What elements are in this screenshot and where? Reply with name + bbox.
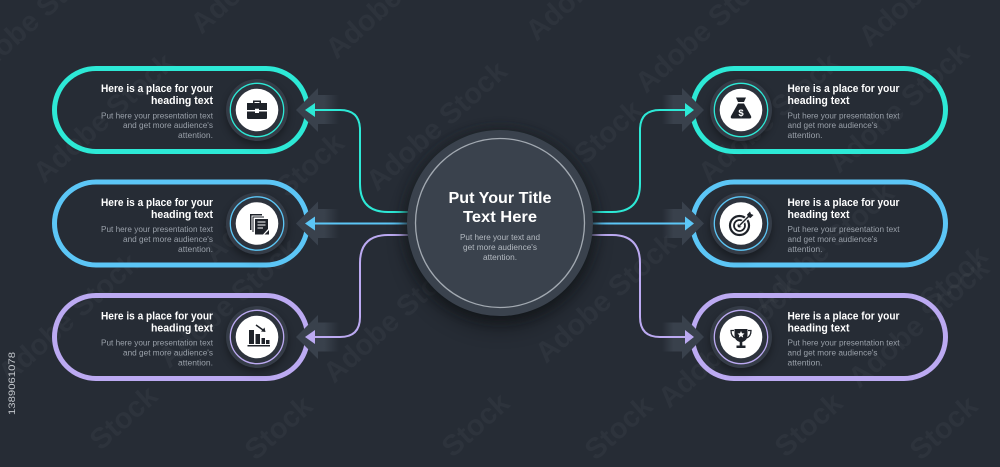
icon: money bag: $ [738, 108, 744, 119]
body text: and get more audience's [788, 348, 878, 358]
heading: Here is a place for your [101, 197, 214, 209]
body text: and get more audience's [123, 348, 213, 358]
subtitle [460, 232, 540, 262]
heading: heading text [788, 95, 850, 107]
heading: heading text [151, 322, 213, 334]
body text [788, 338, 900, 368]
body text [788, 110, 900, 140]
subtitle: get more audience's [463, 242, 537, 252]
panel: right lilac [662, 296, 946, 378]
central circle [403, 127, 597, 327]
body text: and get more audience's [123, 120, 213, 130]
connector: left blue arrow [305, 216, 410, 230]
body text: attention. [788, 130, 822, 140]
arrow block [296, 88, 339, 132]
watermark: Adobe Stock [692, 47, 846, 190]
heading: heading text [788, 209, 850, 221]
icon: target [710, 192, 772, 259]
arrow block [296, 315, 339, 359]
pill outline [692, 182, 946, 265]
pill outline [54, 296, 308, 378]
heading: Here is a place for your [101, 83, 214, 95]
body text: attention. [178, 358, 213, 368]
body text: and get more audience's [788, 120, 878, 130]
body text [101, 338, 214, 368]
connector: right lilac arrow [590, 235, 694, 344]
connector: right blue arrow [590, 216, 694, 230]
watermark: Stock [904, 389, 985, 467]
heading: heading text [151, 95, 213, 107]
disc [407, 130, 593, 316]
body text: attention. [788, 358, 822, 368]
glow shadow [403, 127, 597, 321]
heading [788, 310, 900, 334]
watermark: Adobe Stock [197, 127, 351, 270]
connector: left teal arrow [305, 103, 410, 212]
icon: documents [226, 192, 288, 259]
watermark: Adobe Stock [842, 252, 996, 395]
panel: right teal [662, 68, 946, 152]
body text: Put here your presentation text [101, 110, 214, 120]
watermark: Adobe Stock [495, 94, 649, 237]
watermark: Adobe Stock [317, 247, 471, 390]
icon: trophy [710, 306, 772, 372]
connector: right teal arrow [590, 103, 694, 212]
watermark: Stock [579, 389, 660, 467]
connector: left lilac arrow [305, 235, 410, 344]
heading [101, 83, 214, 107]
title: Put Your Title [448, 190, 552, 207]
pill outline [54, 68, 308, 152]
body text: attention. [178, 244, 213, 254]
icon: briefcase [226, 79, 288, 145]
panel: left blue [54, 182, 339, 265]
heading: heading text [151, 209, 213, 221]
watermark: Adobe Stock [747, 177, 901, 320]
heading: Here is a place for your [788, 197, 900, 209]
watermark: Stock [239, 389, 320, 467]
heading: heading text [788, 322, 850, 334]
arrow block [662, 202, 704, 246]
watermark: Adobe Stock [152, 232, 306, 375]
watermark: Adobe Stock [27, 47, 181, 190]
title [448, 190, 552, 226]
drop shadow [408, 143, 592, 327]
watermark: Stock [769, 386, 850, 464]
watermark: Adobe Stock [529, 227, 683, 370]
stock id: 1389061078 [7, 352, 18, 415]
watermark: Adobe Stock [360, 55, 514, 198]
icon: bar chart [226, 306, 288, 372]
inner ring [416, 138, 584, 308]
arrow block [296, 202, 339, 246]
body text: Put here your presentation text [788, 338, 900, 348]
watermark: Adobe Stock [822, 37, 976, 180]
arrow block [662, 315, 704, 359]
panel: right blue [662, 182, 946, 265]
icon: money bag [710, 79, 772, 145]
watermark: Stock [84, 379, 165, 457]
heading [101, 197, 214, 221]
body text: Put here your presentation text [788, 224, 900, 234]
body text [788, 224, 900, 254]
body text: and get more audience's [788, 234, 878, 244]
heading [101, 310, 214, 334]
pill outline [692, 296, 946, 378]
body text: Put here your presentation text [101, 224, 214, 234]
heading: Here is a place for your [788, 310, 900, 322]
body text: Put here your presentation text [788, 110, 900, 120]
pill outline [54, 182, 308, 265]
heading [788, 83, 900, 107]
heading [788, 197, 900, 221]
heading: Here is a place for your [788, 83, 900, 95]
pill outline [692, 68, 946, 152]
panel: left lilac [54, 296, 339, 378]
title: Text Here [463, 209, 537, 226]
body text: attention. [178, 130, 213, 140]
subtitle: attention. [483, 252, 517, 262]
heading: Here is a place for your [101, 310, 214, 322]
watermark: Stock [914, 239, 995, 317]
body text: Put here your presentation text [101, 338, 214, 348]
body text: attention. [788, 244, 822, 254]
subtitle: Put here your text and [460, 232, 540, 242]
arrow block [662, 88, 704, 132]
body text [101, 110, 214, 140]
panel: left teal [54, 68, 339, 152]
watermark: Stock [436, 386, 517, 464]
body text [101, 224, 214, 254]
watermark: Adobe Stock [652, 272, 806, 415]
body text: and get more audience's [123, 234, 213, 244]
